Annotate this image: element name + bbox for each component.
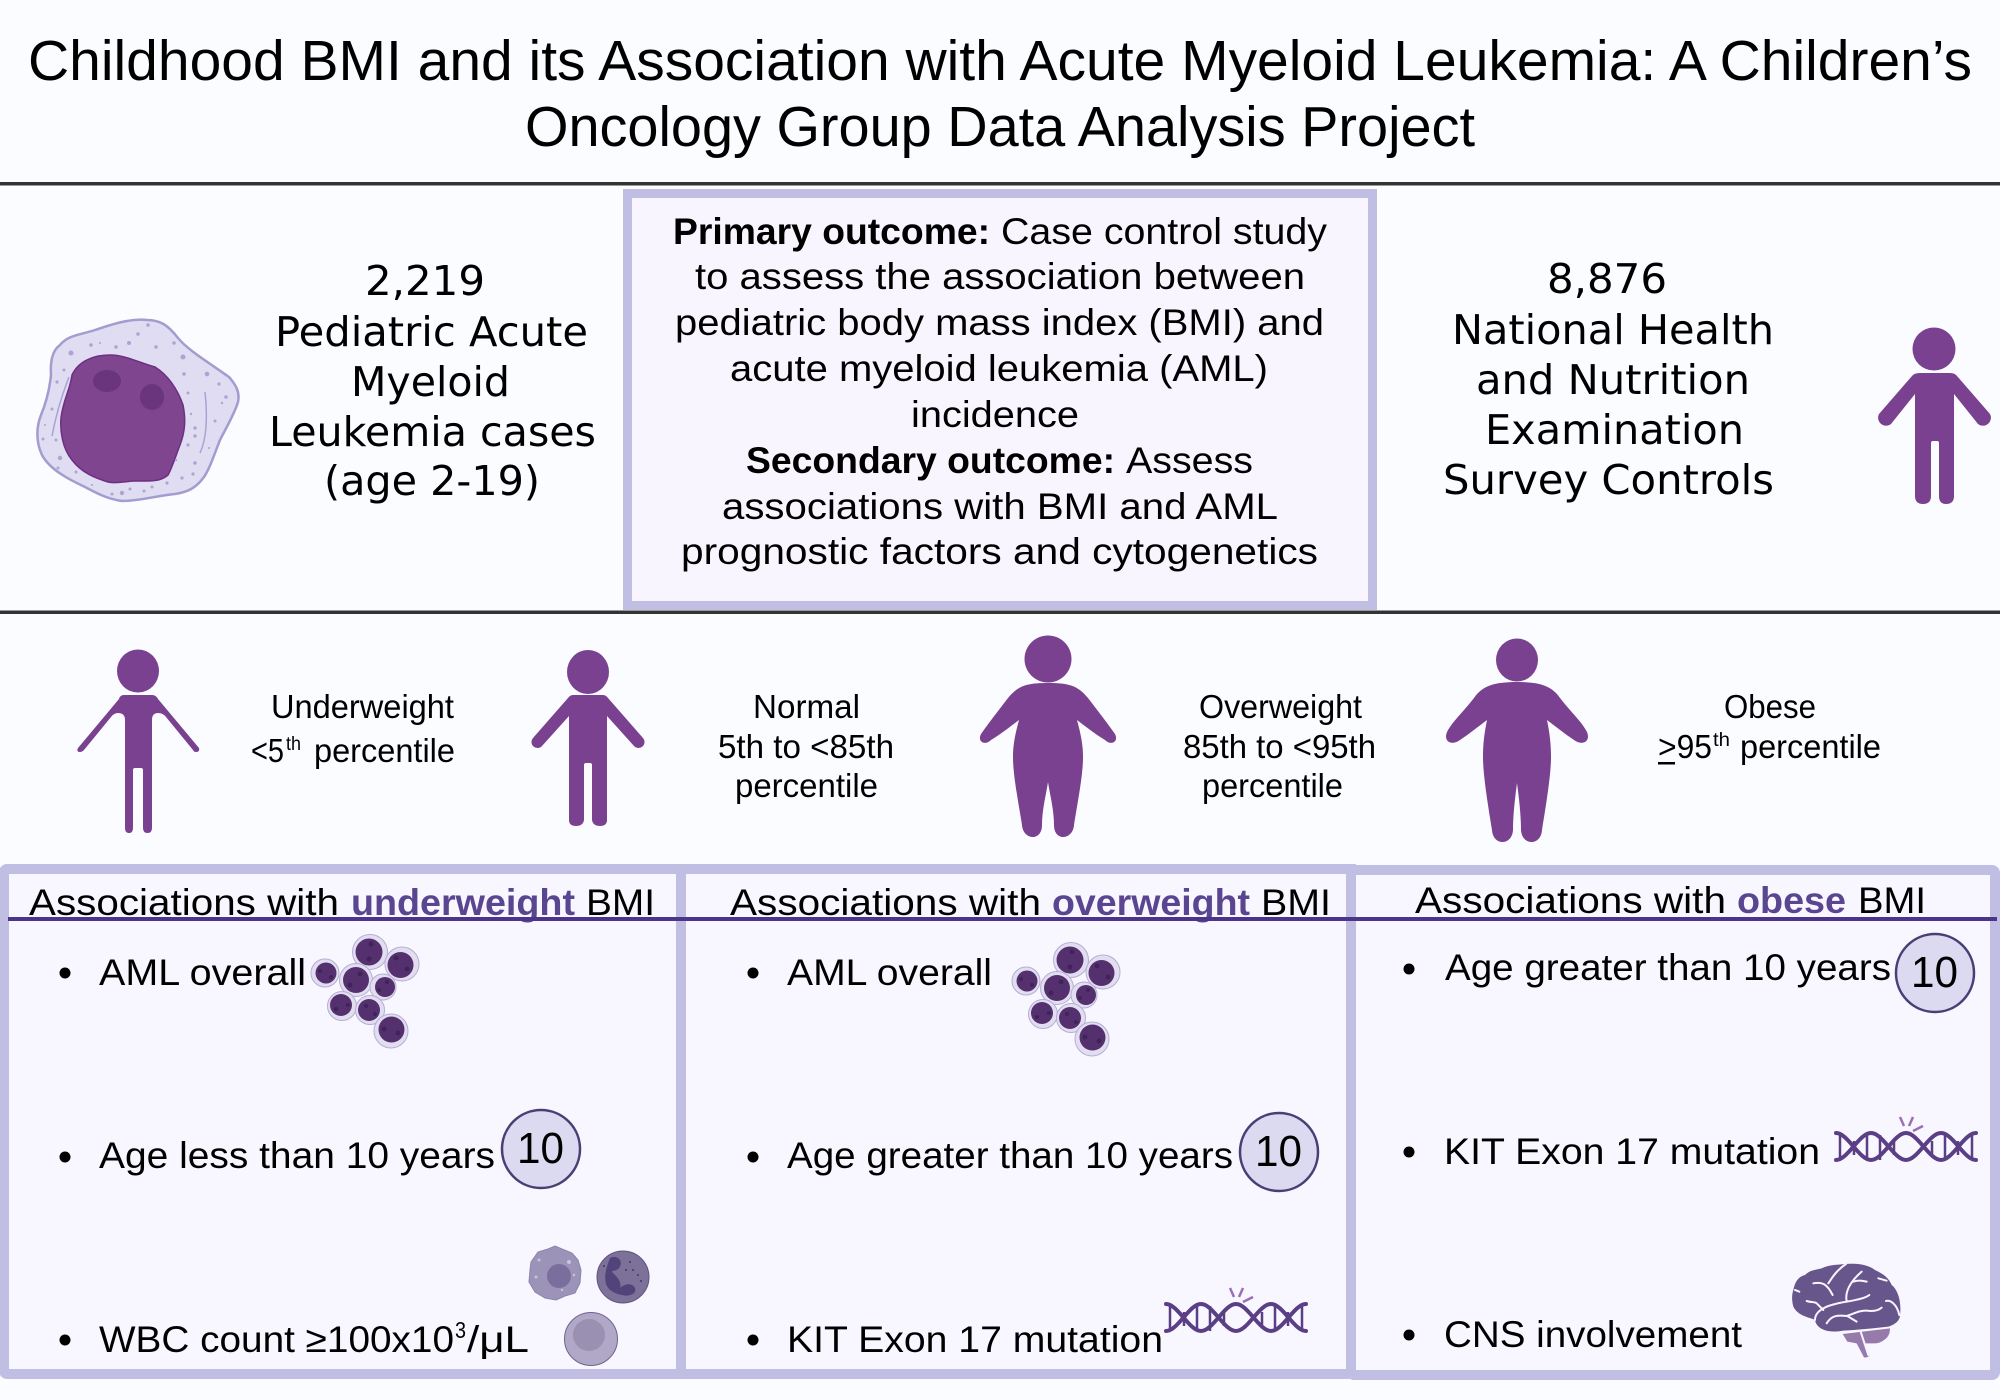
panel: overweight associations: AML overall: [787, 952, 992, 993]
title: Oncology Group Data Analysis Project: [525, 95, 1475, 159]
panel: obese associations: Age greater than 10 years: [1445, 947, 1891, 988]
icon: age 10 badge obese: 10: [1911, 948, 1958, 997]
heading: overweight: BMI: [1261, 882, 1331, 923]
icon: brain: [1792, 1264, 1900, 1357]
icon: cell cluster overweight: [1012, 942, 1120, 1056]
heading: overweight: [730, 882, 1331, 923]
icon: age 10 badge overweight: [1240, 1113, 1318, 1191]
label: overweight: Overweight: [1199, 688, 1362, 725]
panel: overweight associations: [681, 869, 1351, 1374]
panel: underweight associations: /μL: [467, 1319, 529, 1360]
icon: cell cluster underweight: [311, 934, 419, 1048]
label: normal: 5th to <85th: [718, 728, 894, 765]
panel: outcomes: incidence: [911, 394, 1079, 435]
heading: overweight: Associations with: [730, 882, 1041, 923]
panel: underweight associations: 3: [455, 1317, 466, 1343]
icon: age 10 badge overweight: 10: [1255, 1127, 1302, 1176]
icon: DNA mutation obese: [1836, 1117, 1976, 1160]
text: NHANES controls: 8,876: [1547, 255, 1667, 303]
label: underweight: th: [286, 734, 301, 755]
icon: DNA mutation overweight: [1166, 1288, 1306, 1331]
icon: leukemia cell: [37, 320, 239, 501]
icon: age 10 badge underweight: 10: [517, 1124, 564, 1173]
label: underweight: [251, 688, 455, 769]
heading: obese: BMI: [1858, 880, 1926, 921]
heading: underweight: BMI: [586, 882, 655, 923]
label: obese: [1658, 688, 1881, 765]
text: NHANES controls: and Nutrition: [1476, 356, 1750, 404]
heading: obese: Associations with: [1415, 880, 1726, 921]
icon: white blood cells: [529, 1246, 649, 1366]
text: NHANES controls: Examination: [1485, 406, 1744, 454]
label: obese: th: [1713, 730, 1730, 751]
panel: overweight associations: KIT Exon 17 mutation: [787, 1319, 1163, 1360]
label: normal: [718, 688, 894, 804]
text: pediatric AML cases: Myeloid: [351, 358, 510, 406]
title: Childhood BMI and its Association with Acute Myeloid Leukemia: A Children’s: [28, 29, 1972, 93]
panel: outcomes: Secondary outcome:: [746, 440, 1115, 481]
text: NHANES controls: [1443, 255, 1774, 504]
panel: outcomes: acute myeloid leukemia (AML): [730, 348, 1268, 389]
text: pediatric AML cases: Pediatric Acute: [275, 308, 588, 356]
panel: underweight associations: WBC count ≥100x10: [99, 1319, 454, 1360]
icon: age 10 badge obese: [1896, 934, 1974, 1012]
label: normal: percentile: [735, 767, 878, 804]
panel: overweight associations: Age greater than 10 years: [787, 1135, 1233, 1176]
heading: overweight: overweight: [1052, 882, 1250, 923]
text: NHANES controls: National Health: [1452, 306, 1774, 354]
icon: normal person: [531, 650, 645, 826]
panel: underweight associations: AML overall: [99, 952, 306, 993]
panel: outcomes: prognostic factors and cytogenetics: [681, 531, 1318, 572]
text: pediatric AML cases: [269, 257, 596, 505]
panel: obese associations: CNS involvement: [1444, 1314, 1743, 1355]
heading: underweight: underweight: [351, 882, 575, 923]
panel: obese associations: [1351, 870, 1995, 1375]
icon: age 10 badge underweight: [502, 1110, 580, 1188]
panel: outcomes: pediatric body mass index (BMI) and: [675, 302, 1324, 343]
icon: obese person: [1446, 638, 1588, 842]
panel: outcomes: associations with BMI and AML: [722, 486, 1278, 527]
panel: underweight associations: [4, 869, 681, 1374]
label: obese: percentile: [1740, 728, 1881, 765]
text: pediatric AML cases: Leukemia cases: [269, 408, 596, 456]
panel: outcomes: [628, 194, 1372, 606]
icon: control person: [1878, 328, 1991, 504]
heading: underweight: [29, 882, 655, 923]
label: underweight: Underweight: [271, 688, 454, 725]
label: obese: >95: [1658, 728, 1712, 765]
panel: outcomes: Primary outcome:: [673, 211, 990, 252]
panel: outcomes: to assess the association between: [695, 256, 1305, 297]
heading: obese: [1415, 880, 1926, 921]
panel: outcomes: Assess: [1126, 440, 1253, 481]
label: underweight: percentile: [314, 732, 455, 769]
heading: obese: obese: [1737, 880, 1846, 921]
panel: obese associations: KIT Exon 17 mutation: [1444, 1131, 1820, 1172]
label: overweight: 85th to <95th: [1183, 728, 1376, 765]
heading: underweight: Associations with: [29, 882, 339, 923]
panel: underweight associations: Age less than 10 years: [99, 1135, 495, 1176]
label: obese: Obese: [1724, 688, 1816, 725]
label: overweight: [1183, 688, 1376, 804]
label: overweight: percentile: [1202, 767, 1343, 804]
icon: overweight person: [980, 636, 1116, 837]
label: normal: Normal: [753, 688, 860, 725]
label: underweight: <5: [251, 732, 284, 769]
text: pediatric AML cases: 2,219: [365, 257, 485, 305]
panel: outcomes: Case control study: [1001, 211, 1328, 252]
title: [28, 29, 1972, 159]
text: pediatric AML cases: (age 2-19): [324, 457, 540, 505]
icon: underweight person: [77, 650, 199, 833]
text: NHANES controls: Survey Controls: [1443, 456, 1774, 504]
